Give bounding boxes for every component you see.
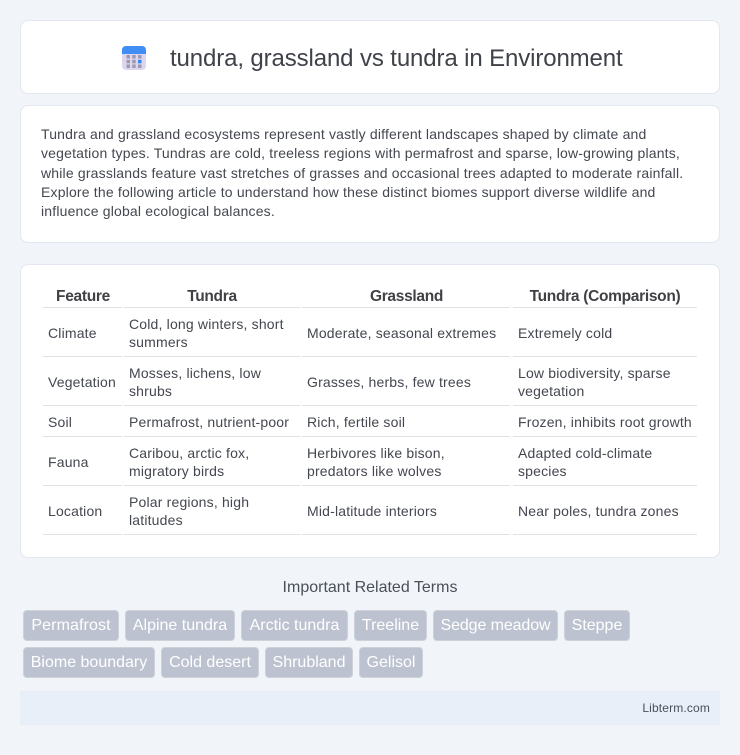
table header row: Grassland bbox=[370, 288, 443, 305]
title: tundra, grassland vs tundra in Environment bbox=[170, 45, 623, 72]
text block: introduction: influence global ecological balances. bbox=[41, 203, 275, 219]
row: soil: Rich, fertile soil bbox=[307, 414, 405, 430]
row: climate: Cold, long winters, short bbox=[129, 316, 284, 332]
text block: introduction: Explore the following article to understand how these distinct biomes support diverse wildlife and bbox=[41, 184, 656, 200]
tags: related terms: Sedge meadow bbox=[440, 617, 550, 634]
row: vegetation: vegetation bbox=[518, 383, 584, 399]
row: vegetation: Low biodiversity, sparse bbox=[518, 365, 671, 381]
row: fauna: predators like wolves bbox=[307, 463, 442, 479]
row: vegetation: Grasses, herbs, few trees bbox=[307, 374, 471, 390]
tags: related terms: Biome boundary bbox=[31, 654, 147, 671]
tags: related terms: Permafrost bbox=[31, 617, 111, 634]
heading: related terms: Important Related Terms bbox=[283, 579, 457, 596]
footer bbox=[20, 691, 720, 725]
footer text: Libterm.com bbox=[642, 701, 710, 715]
table header row bbox=[56, 288, 680, 305]
row: climate bbox=[48, 316, 612, 350]
row: fauna: Herbivores like bison, bbox=[307, 445, 445, 461]
tags: related terms: Shrubland bbox=[273, 654, 345, 671]
table header row: Tundra bbox=[187, 288, 237, 305]
row: fauna: Fauna bbox=[48, 454, 89, 470]
row: climate: Climate bbox=[48, 325, 97, 341]
row: climate: Extremely cold bbox=[518, 325, 612, 341]
text block: introduction: while grasslands feature vast stretches of grasses and occasional trees adapted to moderate rainfall. bbox=[41, 165, 683, 181]
row: climate: Moderate, seasonal extremes bbox=[307, 325, 496, 341]
row: fauna: migratory birds bbox=[129, 463, 224, 479]
tags: related terms: Arctic tundra bbox=[250, 617, 339, 634]
row: fauna: Adapted cold-climate bbox=[518, 445, 652, 461]
tags: related terms: Treeline bbox=[362, 617, 419, 634]
row: soil bbox=[48, 414, 692, 430]
row: vegetation bbox=[48, 365, 671, 399]
panel: header bbox=[20, 20, 720, 94]
row: soil: Frozen, inhibits root growth bbox=[518, 414, 692, 430]
tags: related terms: Alpine tundra bbox=[133, 617, 227, 634]
panel: comparison table bbox=[20, 264, 720, 558]
row: fauna: species bbox=[518, 463, 567, 479]
tags: related terms: Steppe bbox=[572, 617, 622, 634]
row: vegetation: shrubs bbox=[129, 383, 172, 399]
icon: calendar bbox=[122, 46, 146, 70]
row: location: Location bbox=[48, 503, 102, 519]
row: vegetation: Mosses, lichens, low bbox=[129, 365, 261, 381]
text block: introduction bbox=[41, 126, 683, 219]
row: soil: Soil bbox=[48, 414, 72, 430]
row: fauna: Caribou, arctic fox, bbox=[129, 445, 249, 461]
row: location: Polar regions, high bbox=[129, 494, 249, 510]
text block: introduction: Tundra and grassland ecosystems represent vastly different landscapes shaped by climate and bbox=[41, 126, 646, 142]
table header row: Tundra (Comparison) bbox=[530, 288, 680, 305]
text block: introduction: vegetation types. Tundras are cold, treeless regions with permafrost and sparse, low-growing plants, bbox=[41, 145, 680, 161]
row: location: latitudes bbox=[129, 512, 183, 528]
row: climate: summers bbox=[129, 334, 188, 350]
panel: description bbox=[20, 105, 720, 243]
table header row: Feature bbox=[56, 288, 110, 305]
row: fauna bbox=[48, 445, 652, 479]
row: location bbox=[48, 494, 679, 528]
row: location: Mid-latitude interiors bbox=[307, 503, 437, 519]
tags: related terms bbox=[23, 610, 630, 678]
tags: related terms: Gelisol bbox=[367, 654, 415, 671]
row: vegetation: Vegetation bbox=[48, 374, 116, 390]
tags: related terms: Cold desert bbox=[169, 654, 251, 671]
row: location: Near poles, tundra zones bbox=[518, 503, 679, 519]
comparison table bbox=[43, 288, 697, 535]
row: soil: Permafrost, nutrient-poor bbox=[129, 414, 289, 430]
